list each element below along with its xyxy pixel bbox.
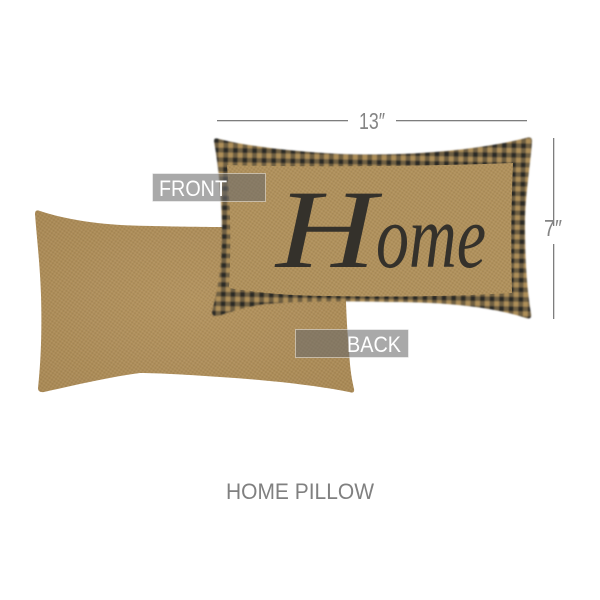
title: HOME PILLOW xyxy=(226,479,374,504)
height dimension: 7 inches: 7″ xyxy=(544,215,562,241)
back pillow xyxy=(35,210,354,393)
gingham border xyxy=(212,137,532,318)
width dimension: 13 inches: 13″ xyxy=(359,108,385,134)
label: BACK: BACK xyxy=(347,332,401,357)
stitched word: Home: ome xyxy=(376,188,486,287)
label: FRONT xyxy=(152,174,266,202)
label: BACK xyxy=(296,330,408,358)
label: FRONT: FRONT xyxy=(159,176,227,201)
front pillow xyxy=(212,137,532,318)
stitched word: Home: H xyxy=(274,168,382,292)
burlap front panel xyxy=(227,163,513,297)
